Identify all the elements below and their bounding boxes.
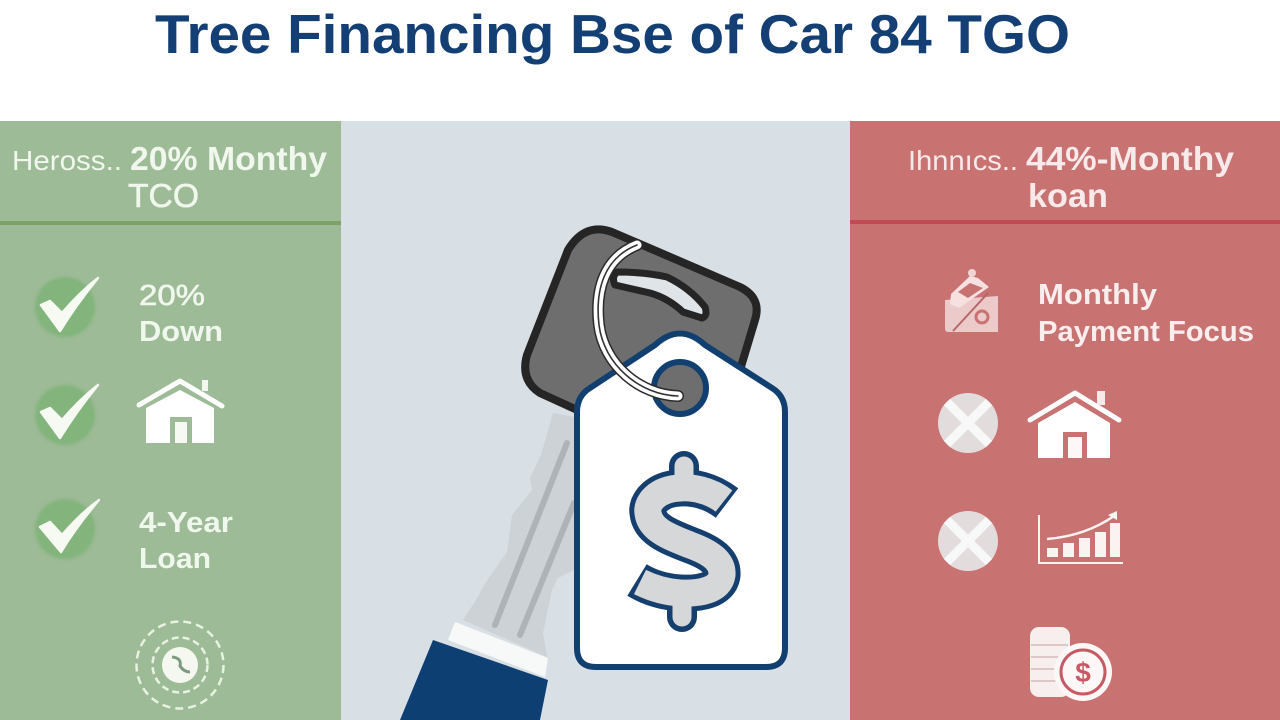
icon: percent tag — [945, 269, 998, 332]
text: 20% down: Down — [139, 316, 223, 348]
panel: center illustration — [341, 121, 850, 720]
check item: 4-year loan — [35, 499, 99, 559]
panel heading: red — [908, 140, 1235, 214]
text: monthly payment focus — [1038, 279, 1254, 348]
panel heading: green: 20% Monthy — [130, 140, 328, 177]
icon: coin stack — [1030, 627, 1112, 701]
text: 20% down: 20% — [139, 280, 205, 312]
icon: house — [139, 380, 222, 443]
panel: green strategy — [0, 121, 341, 720]
text: 20% down — [139, 280, 223, 348]
panel heading: green: TCO — [128, 177, 199, 214]
text: monthly payment focus: Monthly — [1038, 279, 1157, 311]
icon: suit sleeve and cuff — [400, 622, 548, 720]
panel: red strategy — [850, 121, 1280, 720]
icon: rising bar chart — [1039, 511, 1123, 563]
panel heading: red: 44%-Monthy — [1026, 140, 1235, 177]
icon: dashed target — [136, 622, 224, 708]
icon: house — [1030, 391, 1119, 458]
icon: key ring — [598, 245, 678, 396]
icon: cross circle one — [938, 393, 998, 453]
text: 4-year loan — [139, 507, 233, 575]
text: monthly payment focus: Payment Focus — [1038, 316, 1254, 348]
icon: price tag — [577, 334, 785, 667]
icon: car key blade — [463, 413, 590, 657]
check item: 20% down — [35, 277, 98, 337]
icon: cross circle two — [938, 511, 998, 571]
text: 4-year loan: 4-Year — [139, 507, 233, 539]
icon: dollar sign — [637, 466, 727, 617]
panel heading: red: Ihnnıcs.. — [908, 145, 1018, 176]
title: Tree Financing Bse of Car 84 TGO — [155, 3, 1070, 65]
text: 4-year loan: Loan — [139, 543, 211, 575]
panel heading: green — [12, 140, 328, 214]
check item: second — [35, 385, 98, 445]
icon: coin stack: $ — [1075, 657, 1091, 688]
icon: key fob — [525, 229, 757, 409]
panel heading: green: Heross.. — [12, 145, 122, 176]
panel heading: red: koan — [1028, 177, 1108, 214]
